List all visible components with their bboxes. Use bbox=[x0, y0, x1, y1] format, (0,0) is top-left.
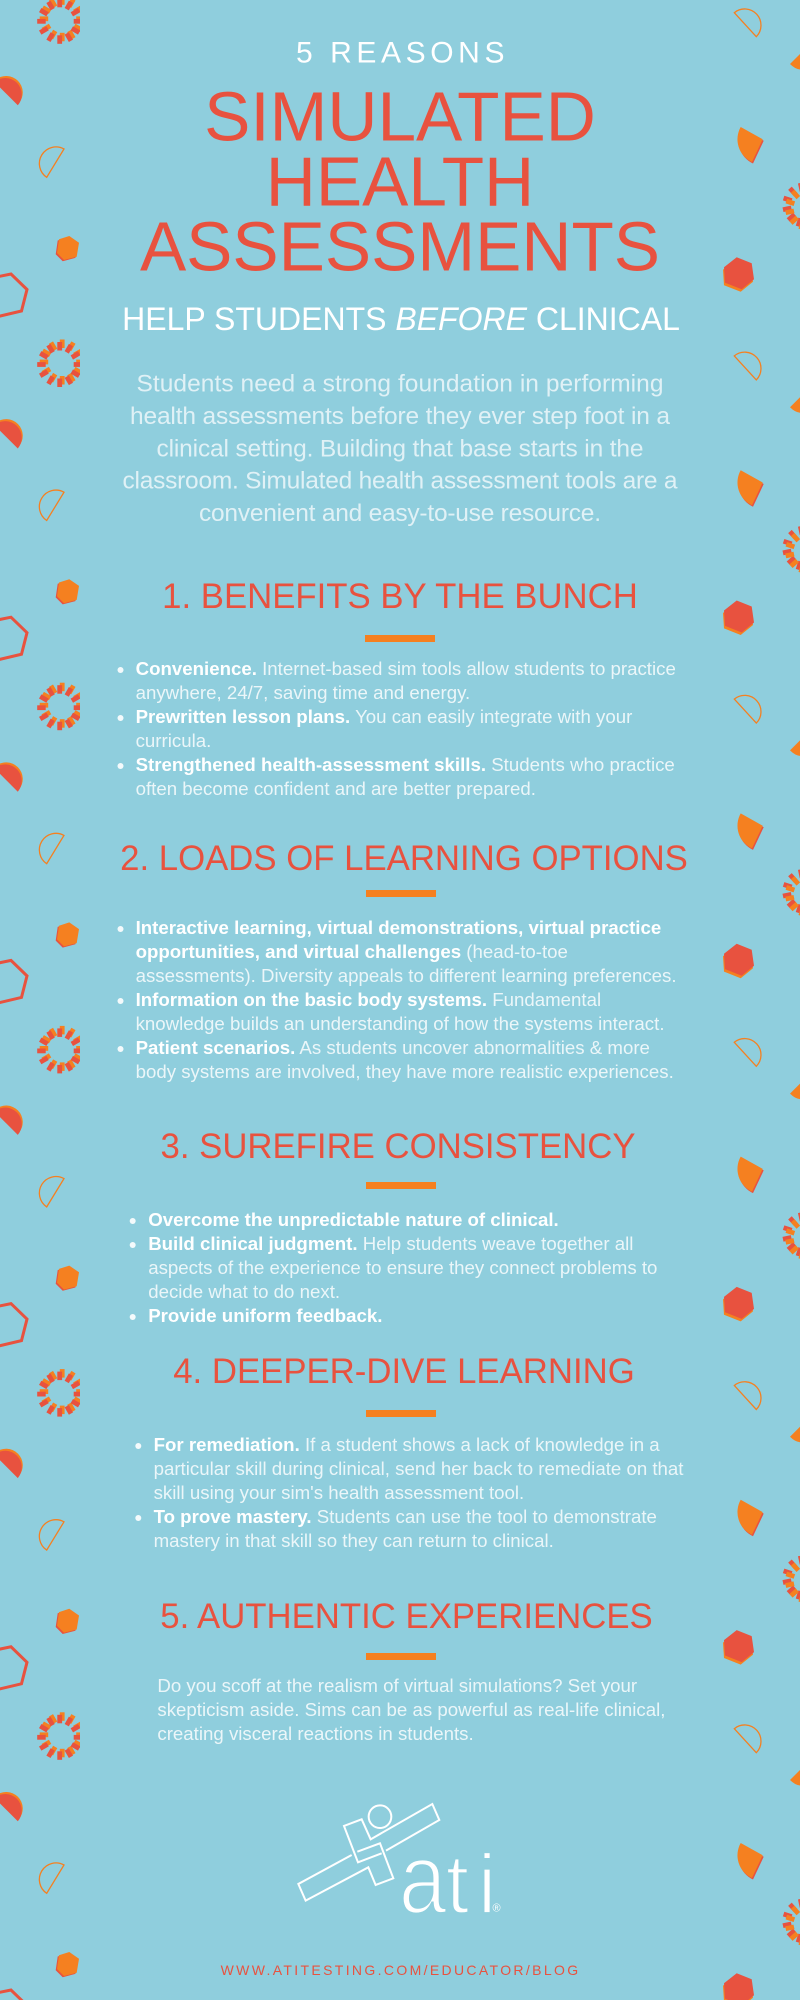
logo wordmark bbox=[399, 1823, 496, 1934]
bullet list 1: curricula. bbox=[136, 730, 211, 751]
bullet list 4 bbox=[135, 1434, 684, 1551]
bullet list 2: assessments). Diversity appeals to different learning preferences. bbox=[136, 965, 677, 986]
accent bar 5 bbox=[366, 1653, 436, 1660]
title: SIMULATED bbox=[204, 78, 596, 156]
bullet list 1 bbox=[118, 658, 676, 799]
logo figure bbox=[298, 1804, 439, 1901]
paragraph 5: Do you scoff at the realism of virtual simulations? Set your bbox=[157, 1675, 637, 1696]
bullet list 4: skill using your sim's health assessment tool. bbox=[154, 1482, 524, 1503]
decorative shapes: left column bbox=[0, 0, 85, 2000]
bullet list 1: often become confident and are better prepared. bbox=[136, 778, 536, 799]
accent bar 3 bbox=[366, 1182, 436, 1189]
bullet list 4: mastery in that skill so they can return to clinical. bbox=[154, 1530, 554, 1551]
registered mark: ® bbox=[492, 1902, 501, 1914]
logo: ATI bbox=[298, 1804, 501, 1934]
bullet list 3: Build clinical judgment. Help students weave together all bbox=[148, 1233, 633, 1254]
bullet list 4: For remediation. If a student shows a lack of knowledge in a bbox=[154, 1434, 660, 1455]
intro paragraph: health assessments before they ever step foot in a bbox=[130, 403, 670, 430]
kicker: 5 reasons: 5 REASONS bbox=[296, 37, 509, 70]
bullet list 1: Prewritten lesson plans. You can easily integrate with your bbox=[136, 706, 632, 727]
bullet list 3: aspects of the experience to ensure they connect problems to bbox=[148, 1257, 657, 1278]
bullet list 2: body systems are involved, they have more realistic experiences. bbox=[136, 1061, 674, 1082]
bullet list 3 bbox=[130, 1209, 657, 1326]
intro paragraph: classroom. Simulated health assessment tools are a bbox=[122, 468, 678, 495]
bullet list 4: particular skill during clinical, send her back to remediate on that bbox=[154, 1458, 684, 1479]
heading 4: 4. DEEPER-DIVE LEARNING bbox=[173, 1353, 635, 1391]
bullet list 1: Convenience. Internet-based sim tools allow students to practice bbox=[136, 658, 676, 679]
accent bar 4 bbox=[366, 1410, 436, 1417]
section 5: authentic experiences bbox=[157, 1598, 665, 1744]
bullet list 2: knowledge builds an understanding of how the systems interact. bbox=[136, 1013, 665, 1034]
bullet list 2: Interactive learning, virtual demonstrations, virtual practice bbox=[136, 917, 661, 938]
bullet list 2: Information on the basic body systems. Fundamental bbox=[136, 989, 601, 1010]
accent bar 1 bbox=[365, 635, 435, 642]
intro paragraph: Students need a strong foundation in performing bbox=[136, 371, 664, 398]
title: ASSESSMENTS bbox=[140, 208, 660, 286]
logo wordmark: a bbox=[399, 1823, 447, 1934]
paragraph 5 bbox=[157, 1675, 665, 1744]
heading 2: 2. LOADS OF LEARNING OPTIONS bbox=[120, 840, 688, 878]
bullet list 1: anywhere, 24/7, saving time and energy. bbox=[136, 682, 470, 703]
bullet list 2: opportunities, and virtual challenges (head-to-toe bbox=[136, 941, 568, 962]
heading 5: 5. AUTHENTIC EXPERIENCES bbox=[160, 1598, 653, 1636]
heading 3: 3. SUREFIRE CONSISTENCY bbox=[160, 1128, 636, 1166]
paragraph 5: creating visceral reactions in students. bbox=[157, 1723, 474, 1744]
bullet list 3: decide what to do next. bbox=[148, 1281, 340, 1302]
section 2: loads of learning options bbox=[118, 840, 688, 1082]
section 1: benefits by the bunch bbox=[118, 578, 676, 799]
accent bar 2 bbox=[366, 890, 436, 897]
title: HEALTH bbox=[266, 143, 534, 221]
paragraph 5: skepticism aside. Sims can be as powerful as real-life clinical, bbox=[157, 1699, 665, 1720]
subtitle: HELP STUDENTS BEFORE CLINICAL bbox=[122, 301, 680, 337]
bullet list 2: Patient scenarios. As students uncover abnormalities & more bbox=[136, 1037, 650, 1058]
bullet list 3: Provide uniform feedback. bbox=[148, 1305, 382, 1326]
bullet list 4: To prove mastery. Students can use the tool to demonstrate bbox=[154, 1506, 657, 1527]
logo wordmark: ti bbox=[446, 1837, 496, 1931]
section 4: deeper-dive learning bbox=[135, 1353, 684, 1551]
section 3: surefire consistency bbox=[130, 1128, 657, 1326]
intro paragraph: clinical setting. Building that base starts in the bbox=[156, 435, 644, 462]
bullet list 2 bbox=[118, 917, 677, 1082]
bullet list 3: Overcome the unpredictable nature of clinical. bbox=[148, 1209, 559, 1230]
title bbox=[140, 78, 660, 286]
bullet list 1: Strengthened health-assessment skills. Students who practice bbox=[136, 754, 675, 775]
intro paragraph bbox=[122, 371, 678, 527]
footer url: WWW.ATITESTING.COM/EDUCATOR/BLOG bbox=[221, 1962, 580, 1978]
decorative shapes: right column bbox=[723, 9, 800, 2000]
heading 1: 1. BENEFITS BY THE BUNCH bbox=[162, 578, 638, 616]
intro paragraph: convenient and easy-to-use resource. bbox=[199, 500, 601, 527]
